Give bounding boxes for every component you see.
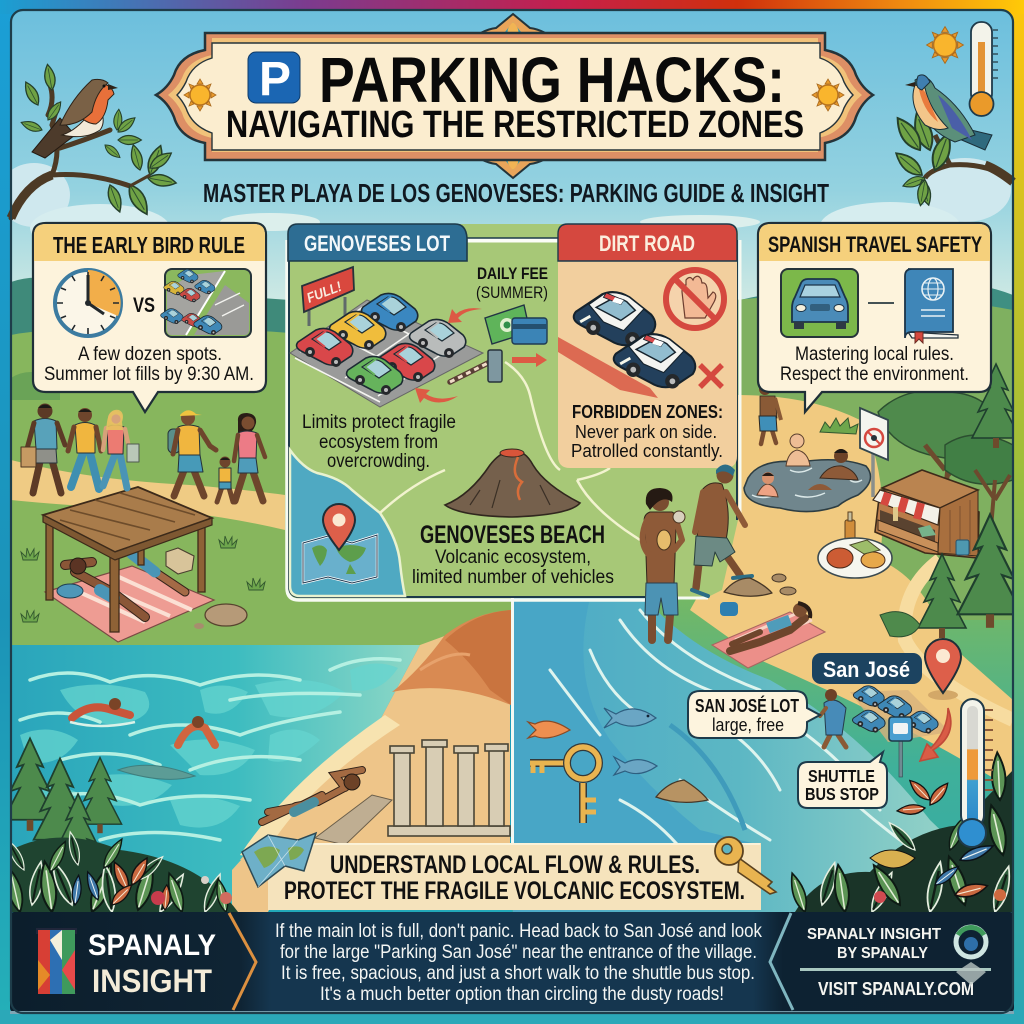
walking person — [820, 689, 846, 747]
main title: PARKING HACKS: — [319, 44, 785, 116]
daily fee label — [476, 268, 548, 302]
text: Genoveses Beach: GENOVESES BEACH — [420, 521, 605, 549]
parking patch and cars — [850, 686, 950, 742]
right branch with blue bird — [891, 75, 1013, 206]
distant hills — [12, 278, 1012, 335]
text: forbidden zones: FORBIDDEN ZONES: — [572, 401, 723, 422]
person with snack — [643, 488, 685, 640]
left branch with robin — [11, 64, 177, 218]
subtitle: MASTER PLAYA DE LOS GENOVESES: PARKING GUIDE & INSIGHT — [203, 178, 829, 208]
red curved arrow — [920, 708, 951, 761]
title second line: NAVIGATING THE RESTRICTED ZONES — [226, 104, 804, 146]
plaque inner cream — [177, 43, 853, 150]
icon: large golden key — [715, 837, 776, 894]
land: right beach and meadow — [690, 294, 1013, 790]
food plate and bottle — [818, 512, 892, 578]
parked cars — [297, 293, 466, 395]
sunbather figures — [65, 554, 185, 617]
boardwalk — [315, 795, 392, 845]
rock under foot — [724, 578, 772, 596]
walkers group — [21, 404, 265, 502]
tab: Genoveses Lot — [288, 224, 467, 261]
parking P icon — [248, 52, 300, 106]
callout: shuttle bus stop: BUS STOP — [805, 784, 879, 804]
circular logo — [956, 927, 986, 985]
FULL sign — [302, 267, 354, 326]
parking lot — [290, 300, 483, 407]
right chevron — [770, 913, 793, 1010]
walker 3 with map — [103, 410, 139, 488]
red arrows — [415, 308, 547, 403]
text: limits: overcrowding. — [327, 451, 430, 472]
text: forbidden zones — [571, 401, 723, 461]
picnic towel — [45, 566, 214, 642]
body text: Summer lot fills by 9:30 AM. — [44, 364, 254, 385]
credit block: SPANALY INSIGHT — [807, 926, 941, 943]
text: Genoveses Beach: Volcanic ecosystem, — [435, 547, 591, 568]
tab: Genoveses Lot: GENOVESES LOT — [304, 231, 450, 256]
brand name: INSIGHT — [92, 963, 212, 999]
white divider between bays — [511, 598, 514, 848]
pine trees — [918, 514, 1022, 638]
body text: Mastering local rules. — [795, 344, 954, 365]
body text: Respect the environment. — [780, 364, 969, 385]
text: Genoveses Beach: limited number of vehicles — [412, 567, 614, 588]
tab and panel: Dirt Road — [558, 224, 737, 468]
text: limits — [302, 412, 456, 472]
sky with clouds — [0, 10, 1013, 310]
credit block: BY SPANALY — [837, 945, 928, 962]
blue fish small — [614, 757, 657, 775]
golden key in water — [530, 747, 599, 823]
branch — [891, 111, 1013, 206]
land: left meadow — [11, 330, 512, 650]
plaque frame — [156, 33, 873, 160]
bush on right — [880, 612, 920, 637]
callout: early bird rule — [33, 223, 266, 412]
callout: shuttle bus stop: SHUTTLE — [808, 766, 875, 786]
passport icon — [905, 269, 958, 343]
no-motor sign — [860, 408, 888, 497]
sea objects — [528, 708, 708, 823]
two standing people — [643, 464, 796, 640]
VS label: VS — [133, 294, 155, 317]
swimmers and ruins — [70, 698, 510, 845]
trees behind kiosk — [878, 364, 1020, 540]
foliage bottom-right — [786, 699, 1014, 915]
reclining person — [262, 770, 362, 822]
sun left — [184, 79, 216, 111]
blue bird — [905, 75, 992, 150]
brand name — [88, 929, 216, 999]
callout: San Jose lot: SAN JOSÉ LOT — [695, 695, 799, 716]
banner: understand local flow — [268, 843, 761, 910]
swimmer red — [70, 698, 135, 726]
walker 1 with bag — [21, 404, 65, 493]
beach kiosk — [873, 470, 979, 558]
text: forbidden zones: Never park on side. — [575, 421, 717, 442]
text: limits: Limits protect fragile — [302, 412, 456, 433]
parking thumbnail — [161, 269, 251, 337]
blue fish — [604, 708, 656, 728]
banner: understand local flow: UNDERSTAND LOCAL FLOW & RULES. — [330, 851, 700, 879]
grass bush — [820, 418, 858, 434]
callout: San Jose lot: large, free — [712, 715, 784, 735]
bottom-left: sand dune and beach — [232, 610, 511, 912]
footer paragraph: It is free, spacious, and just a short walk to the shuttle bus stop. — [281, 963, 755, 984]
branch and leaves — [11, 64, 177, 218]
tab and panel: Dirt Road: DIRT ROAD — [599, 231, 695, 256]
body text: A few dozen spots. — [78, 344, 222, 365]
robin bird — [32, 79, 118, 158]
map: coastal sea — [290, 450, 405, 596]
rock and grass on meadow — [21, 536, 265, 629]
map: road lines — [380, 362, 640, 540]
swimmer 2 — [178, 716, 215, 745]
sunbather on towel — [712, 602, 825, 668]
no entry hand icon — [666, 270, 724, 328]
body text — [780, 344, 969, 385]
foliage bottom-left — [3, 738, 238, 915]
dash between icons — [868, 302, 894, 304]
brand name: SPANALY — [88, 929, 216, 962]
icon: map with pin — [303, 504, 377, 583]
San Jose area — [688, 639, 961, 808]
daily fee label: (SUMMER) — [476, 283, 548, 302]
plaque crown ornaments — [469, 14, 557, 178]
body text — [44, 344, 254, 385]
footer paragraph: for the large "Parking San José" near the entrance of the village. — [280, 942, 757, 963]
footer paragraph — [275, 921, 762, 1005]
orange fish — [528, 721, 570, 738]
top right thermometer — [970, 22, 998, 116]
icon: cash and card — [485, 305, 547, 344]
hot-spring pool with bathers — [744, 434, 870, 512]
text: forbidden zones: Patrolled constantly. — [571, 440, 723, 461]
footer paragraph: If the main lot is full, don't panic. Head back to San José and look — [275, 921, 762, 942]
text: limits: ecosystem from — [319, 432, 438, 453]
icon: folded map — [242, 833, 316, 887]
cooler — [166, 548, 194, 574]
walker 2 — [68, 408, 101, 489]
daily fee label: DAILY FEE — [477, 264, 548, 283]
bottom-right: sea and shore — [513, 598, 940, 912]
credit block: VISIT SPANALY.COM — [818, 979, 974, 999]
location pin — [925, 639, 961, 700]
walker 5 with long hair — [234, 413, 265, 501]
clock icon — [55, 270, 121, 336]
callout: San Jose lot — [688, 691, 820, 738]
FULL sign: FULL! — [304, 278, 344, 306]
red X mark — [700, 365, 722, 387]
callout: early bird rule: THE EARLY BIRD RULE — [53, 232, 245, 258]
volcano — [445, 449, 580, 517]
left chevron — [229, 913, 256, 1010]
credit block — [800, 926, 991, 999]
parking P icon: P — [259, 53, 291, 106]
bottom-left: turquoise bay — [11, 645, 420, 912]
panel base — [288, 224, 738, 597]
forbidden red strip — [558, 337, 658, 398]
text: Genoveses Beach — [413, 525, 614, 583]
banner: understand local flow: PROTECT THE FRAGILE VOLCANIC ECOSYSTEM. — [284, 877, 745, 905]
callout: shuttle bus stop — [798, 752, 887, 808]
logo block — [36, 928, 77, 994]
footer bar — [10, 912, 1014, 1014]
title plaque — [156, 14, 873, 178]
sun right — [812, 79, 844, 111]
standing person near callout — [759, 383, 781, 444]
rock in water — [656, 780, 708, 802]
right scene objects — [643, 364, 1022, 668]
top right sun icon — [927, 27, 963, 63]
map panel — [287, 224, 740, 600]
child walker — [217, 456, 233, 502]
barrier gate — [450, 350, 502, 382]
ancient columns — [388, 740, 510, 836]
posts and roof — [46, 520, 205, 632]
police cars — [574, 292, 695, 389]
person stepping on rock — [692, 464, 752, 596]
callout: Spanish travel safety — [758, 223, 991, 412]
walker 4 with backpack and cap — [168, 410, 216, 496]
car icon — [781, 269, 858, 337]
submerged swimmer — [118, 765, 195, 779]
thermometer lower right — [958, 699, 993, 847]
pergola with sunbathers — [43, 487, 214, 642]
footer paragraph: It's a much better option than circling the dusty roads! — [320, 984, 724, 1005]
bus stop sign — [889, 717, 912, 777]
San Jose tag: San José — [823, 657, 910, 682]
